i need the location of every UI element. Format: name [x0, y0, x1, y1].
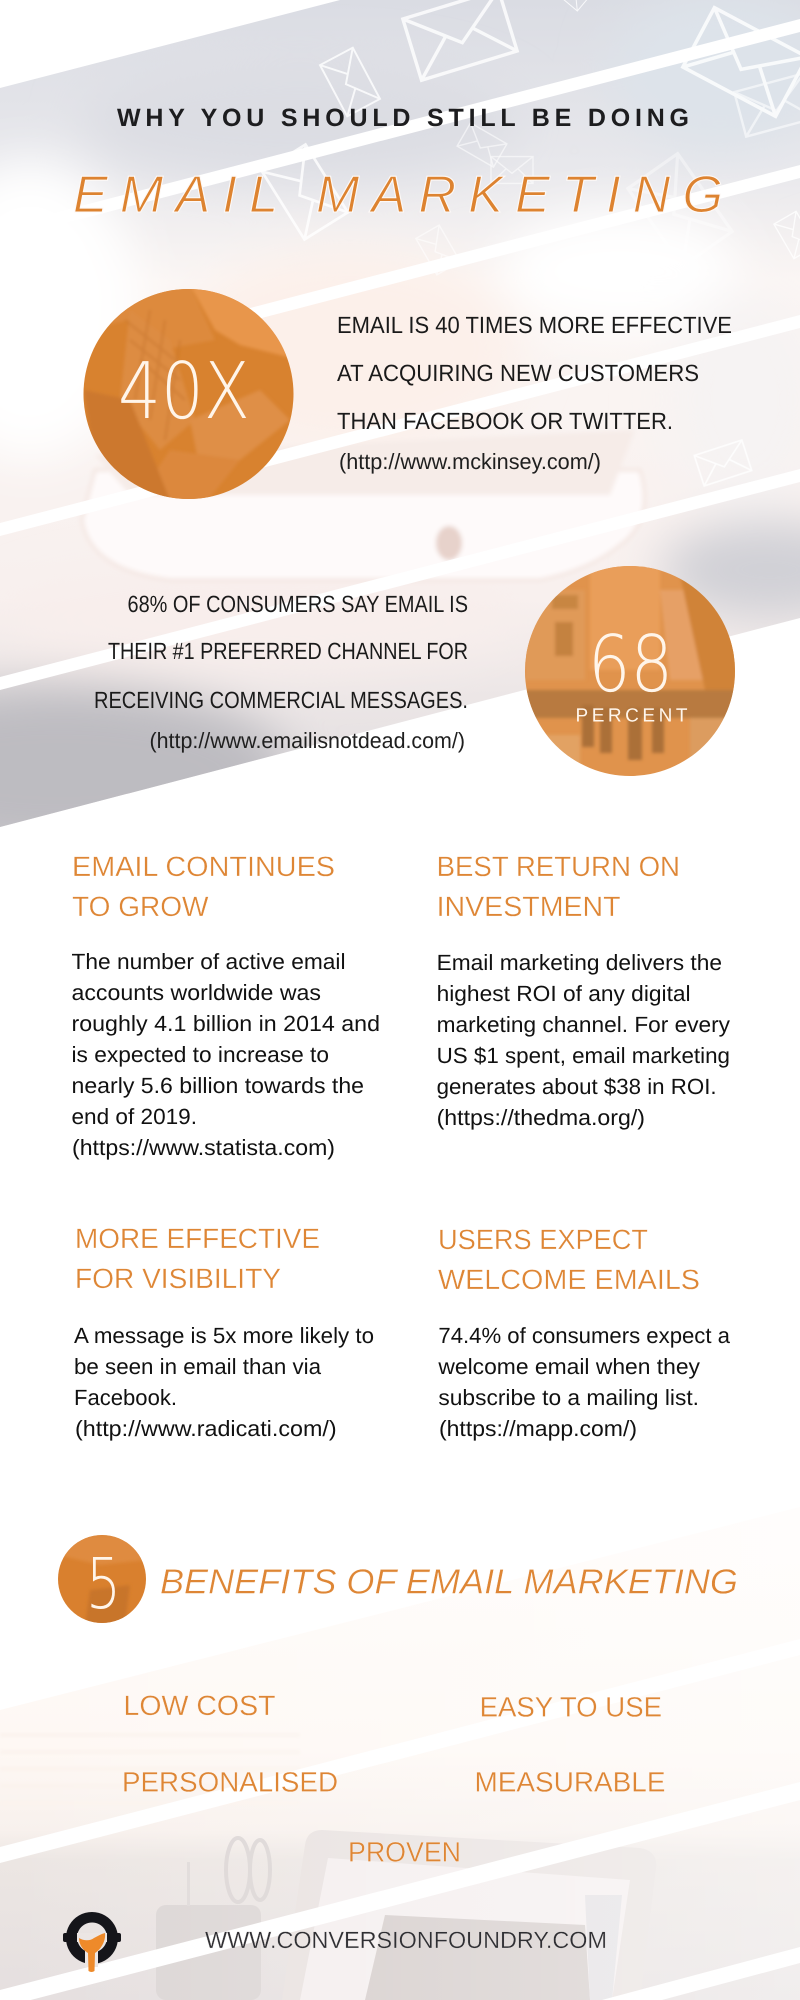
body text: be seen in email than via [74, 1354, 322, 1379]
heading: INVESTMENT [437, 891, 621, 922]
laptop [300, 1830, 626, 2000]
body text [437, 1323, 731, 1441]
body text [74, 1323, 374, 1441]
body text [72, 949, 380, 1160]
panel: email continues to grow [72, 851, 380, 1160]
heading: TO GROW [72, 891, 209, 922]
heading: USERS EXPECT [438, 1224, 648, 1255]
body text: The number of active email [72, 949, 346, 974]
benefit: personalised: PERSONALISED [122, 1767, 338, 1798]
body text: Facebook. [74, 1385, 177, 1410]
body text: (https://www.statista.com) [72, 1135, 335, 1160]
section heading: BENEFITS OF EMAIL MARKETING [160, 1562, 738, 1602]
panel: benefits list [122, 1690, 666, 1868]
body text: 74.4% of consumers expect a [438, 1323, 731, 1348]
diagonal white stripes [0, 19, 800, 690]
heading line one: WHY YOU SHOULD STILL BE DOING [117, 104, 689, 132]
icon: floating envelopes [262, 0, 800, 486]
panel: best return on investment [437, 851, 730, 1130]
stat number: 40X [118, 347, 250, 437]
stat description: 68% OF CONSUMERS SAY EMAIL IS [128, 591, 468, 617]
stat number: 68 [588, 620, 673, 710]
body text: generates about $38 in ROI. [437, 1074, 717, 1099]
benefit: easy to use: EASY TO USE [480, 1692, 662, 1723]
body text: Email marketing delivers the [437, 950, 722, 975]
benefit: measurable: MEASURABLE [474, 1767, 666, 1798]
body text: welcome email when they [437, 1354, 700, 1379]
stat description: (http://www.mckinsey.com/) [339, 449, 601, 474]
body text: A message is 5x more likely to [74, 1323, 374, 1348]
body text: nearly 5.6 billion towards the [72, 1073, 364, 1098]
body text: (http://www.radicati.com/) [75, 1416, 337, 1441]
body text [437, 950, 730, 1130]
panel: 68 percent stat [94, 560, 740, 776]
heading: FOR VISIBILITY [75, 1263, 281, 1294]
body text: (https://thedma.org/) [437, 1105, 645, 1130]
stat description: (http://www.emailisnotdead.com/) [150, 728, 465, 753]
benefit: low cost: LOW COST [124, 1690, 276, 1721]
stat description [337, 312, 732, 474]
body text: highest ROI of any digital [437, 981, 691, 1006]
heading [437, 851, 680, 922]
heading: EMAIL CONTINUES [72, 851, 335, 882]
stat description: THEIR #1 PREFERRED CHANNEL FOR [108, 638, 468, 664]
body text: US $1 spent, email marketing [437, 1043, 730, 1068]
heading [72, 851, 335, 922]
heading: BEST RETURN ON [437, 851, 680, 882]
heading line two: EMAIL MARKETING [73, 166, 723, 224]
circle badge: 40X [84, 285, 300, 510]
badge number: 5 [86, 1543, 121, 1625]
stat unit: PERCENT [576, 706, 688, 726]
title [73, 104, 723, 224]
panel: hero photo background [0, 0, 800, 855]
panel: footer photo background [0, 1663, 800, 2000]
stat description [94, 591, 468, 753]
footer diagonal stripes [0, 1639, 800, 2000]
circle badge: 5 [58, 1535, 146, 1625]
body text: end of 2019. [72, 1104, 197, 1129]
panel: benefits heading [58, 1535, 738, 1625]
heading [75, 1223, 320, 1294]
heading [438, 1224, 700, 1295]
stat description: EMAIL IS 40 TIMES MORE EFFECTIVE [337, 312, 732, 338]
body text: subscribe to a mailing list. [438, 1385, 699, 1410]
panel: 40x stat [84, 285, 732, 510]
body text: roughly 4.1 billion in 2014 and [72, 1011, 380, 1036]
body text: accounts worldwide was [72, 980, 321, 1005]
stat description: RECEIVING COMMERCIAL MESSAGES. [94, 687, 468, 713]
stat description: THAN FACEBOOK OR TWITTER. [337, 408, 673, 434]
website url: WWW.CONVERSIONFOUNDRY.COM [205, 1927, 607, 1953]
icon: conversion foundry logo [63, 1912, 121, 1972]
benefit: proven: PROVEN [348, 1837, 461, 1868]
heading: WELCOME EMAILS [438, 1264, 700, 1295]
body text: marketing channel. For every [437, 1012, 730, 1037]
panel: users expect welcome emails [437, 1224, 731, 1441]
pen cup with scissors [156, 1838, 270, 2000]
panel: more effective for visibility [74, 1223, 374, 1441]
circle badge: 68 percent [525, 560, 740, 776]
heading: MORE EFFECTIVE [75, 1223, 320, 1254]
body text: (https://mapp.com/) [439, 1416, 637, 1441]
body text: is expected to increase to [72, 1042, 329, 1067]
stat description: AT ACQUIRING NEW CUSTOMERS [337, 360, 699, 386]
